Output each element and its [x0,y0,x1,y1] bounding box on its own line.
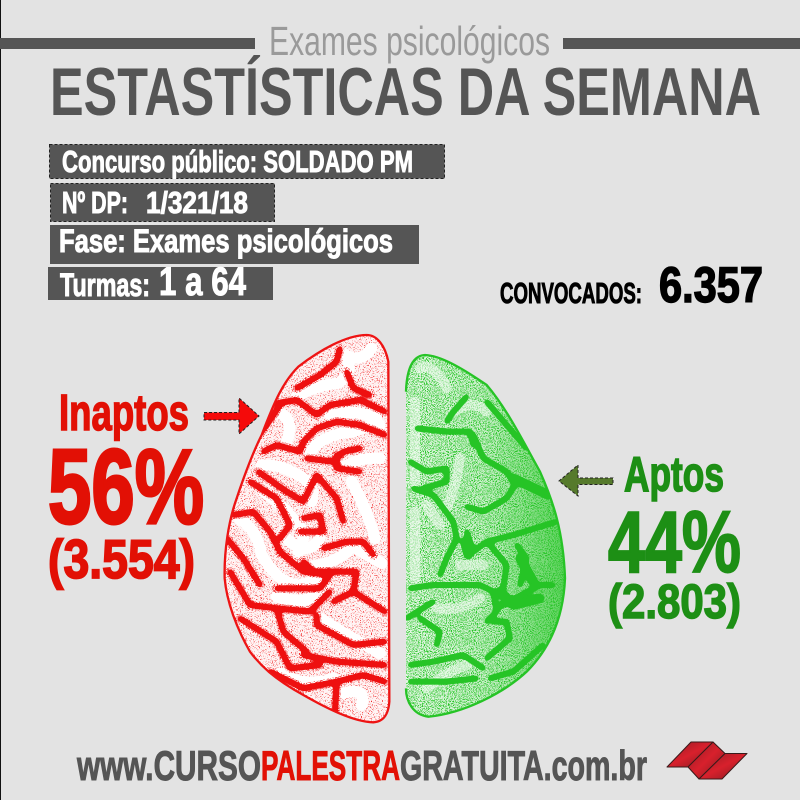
header rule left [0,38,255,49]
info box: concurso: Concurso público: SOLDADO PM [62,144,413,179]
info box: turmas: 1 a 64 [159,260,247,304]
subtitle: Exames psicológicos [269,18,550,64]
percentage: 44%: 44% [608,494,741,591]
info box: numero DP [50,184,274,222]
brain left hemisphere: inaptos [220,325,393,725]
percentage: 56%: 56% [48,428,204,546]
icon: red folded logo [667,742,747,779]
count: 2.803: (2.803) [608,576,741,629]
info box: numero DP: Nº DP: [62,185,128,220]
convocados number: 6.357 [659,257,763,313]
label: inaptos: Inaptos [59,384,189,441]
brain right hemisphere: aptos [403,345,570,722]
footer url: www.CURSO [76,742,261,789]
info box: turmas: Turmas: [60,267,150,303]
footer url: GRATUITA.com.br [400,742,647,789]
label: aptos: Aptos [624,448,724,502]
footer url: PALESTRA [261,742,400,789]
info box: turmas [48,260,273,304]
header rule right [563,38,800,49]
info box: numero DP: 1/321/18 [146,185,248,220]
arrow: green pointing left [559,465,613,496]
arrow: red pointing right [204,398,259,434]
convocados label: CONVOCADOS: [500,278,642,310]
footer url [76,742,647,789]
count: 3.554: (3.554) [48,528,195,590]
left edge line [0,0,1,800]
info box: fase: Fase: Exames psicológicos [59,223,393,259]
